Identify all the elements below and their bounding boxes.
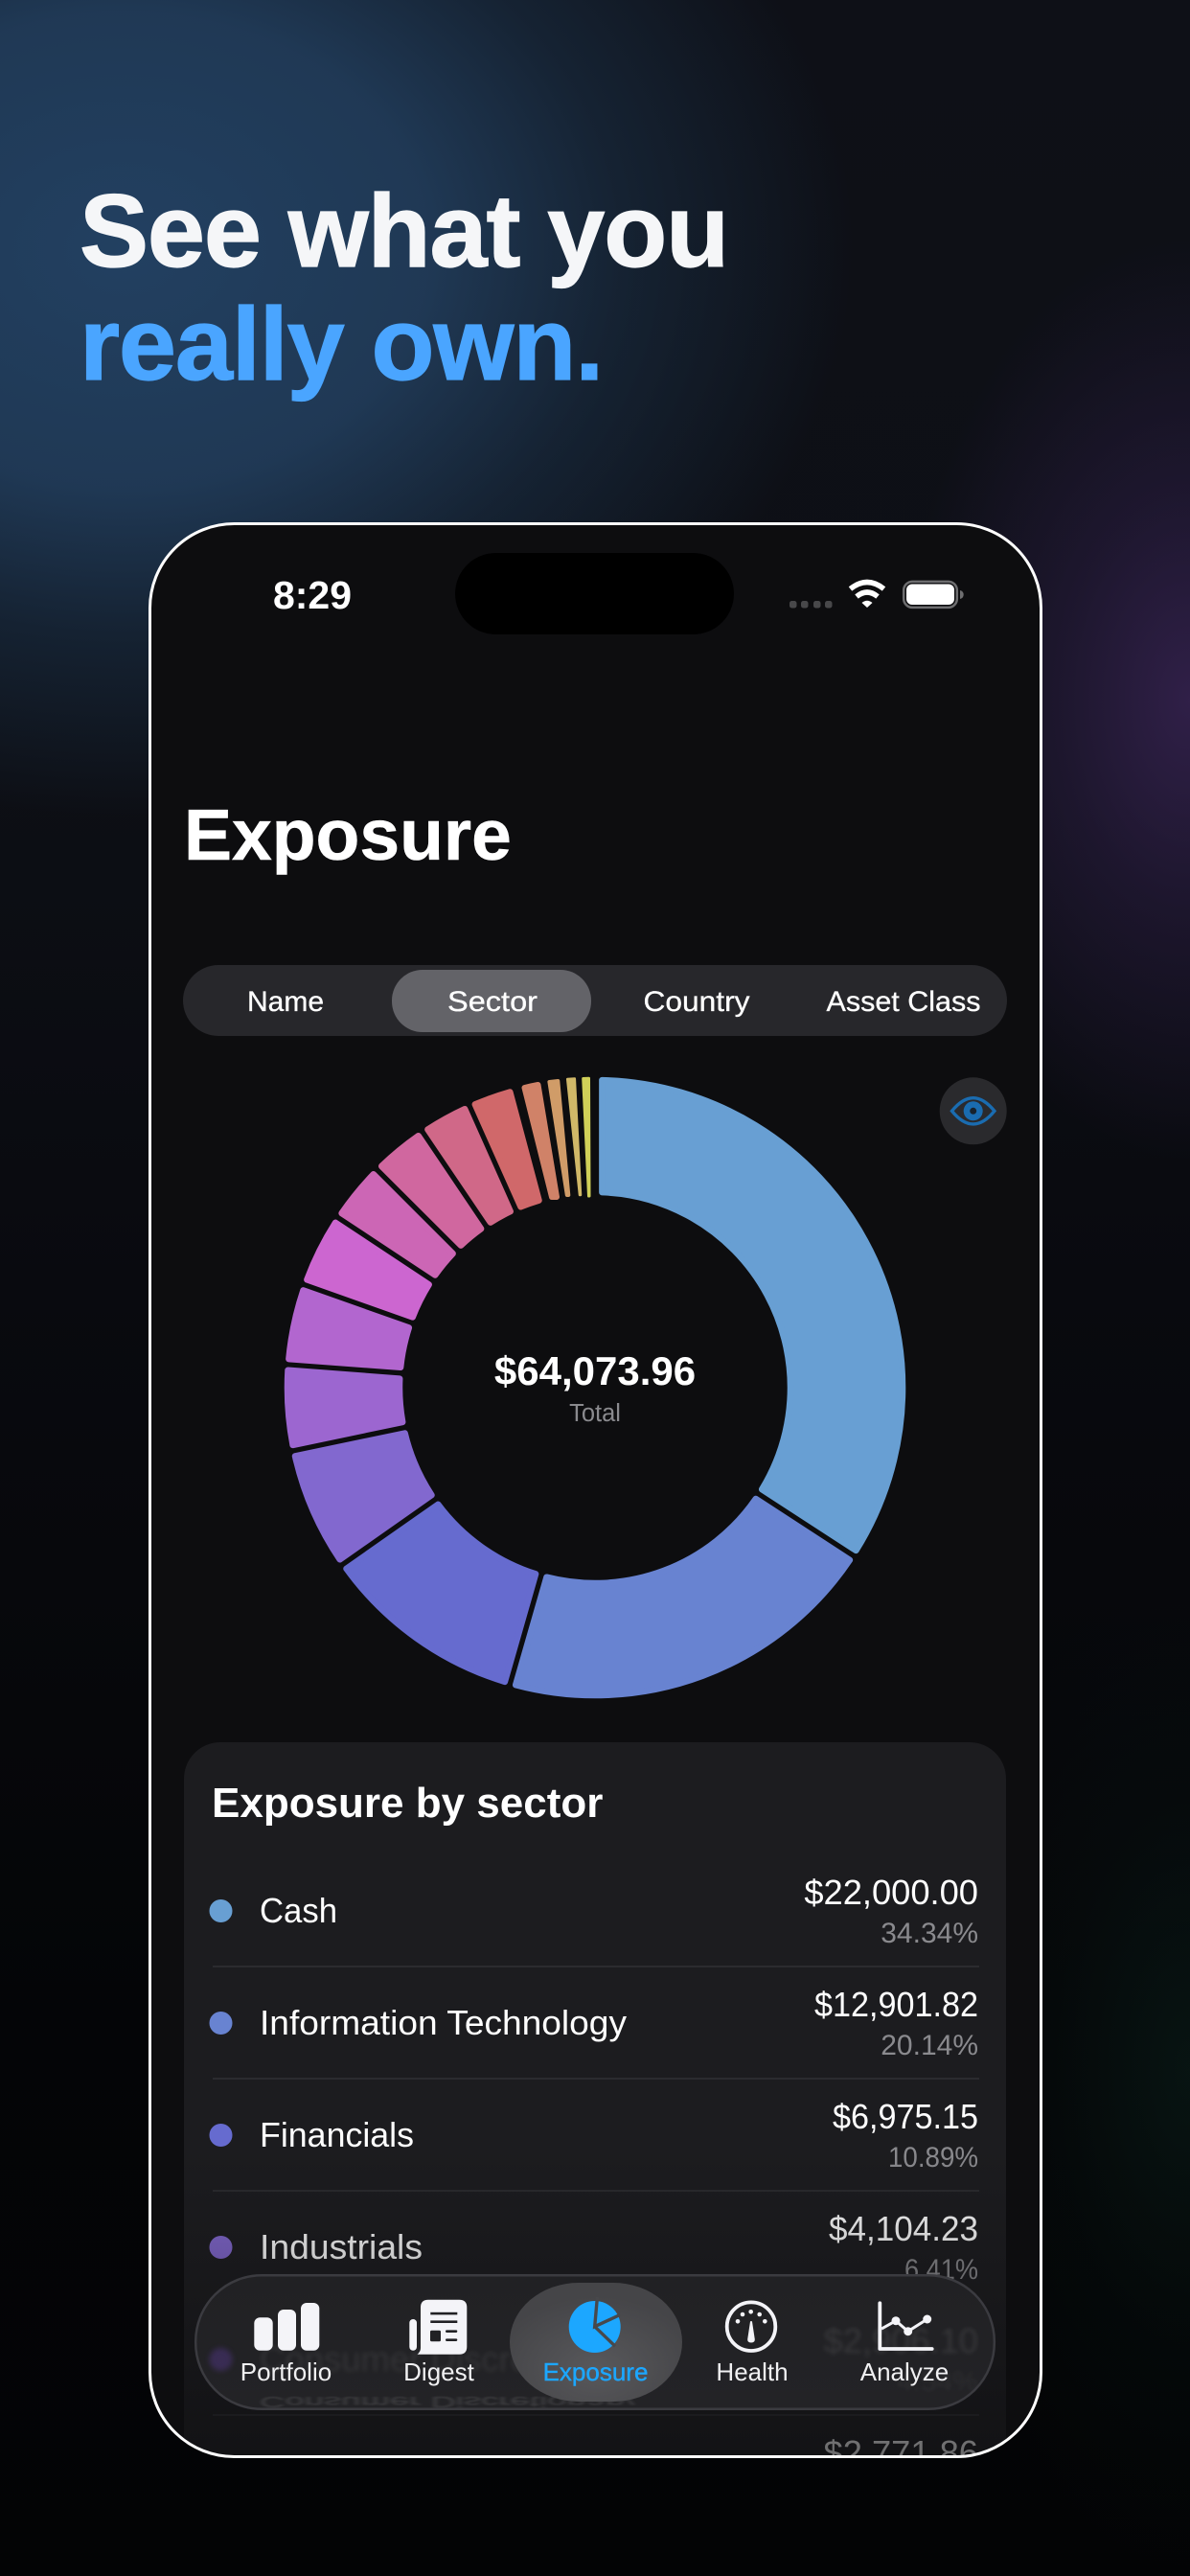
blurred content behind glass: $2,906.10 [824, 2321, 978, 2360]
title: really own. [80, 286, 603, 402]
row: cash [209, 1878, 977, 1944]
icon: bars [254, 2303, 319, 2351]
tab: exposure: Exposure [543, 2358, 648, 2386]
donut chart [287, 1078, 903, 1695]
row: industrials: $4,104.23 [829, 2209, 978, 2248]
blurred content behind glass: 4.54% [897, 2366, 978, 2398]
row: information technology: 20.14% [881, 2030, 978, 2061]
tab: portfolio [240, 2303, 332, 2386]
icon: newspaper [409, 2300, 467, 2355]
row: information technology: Information Technology [260, 2003, 628, 2042]
status bar time: 8:29 [273, 573, 352, 617]
status icons [790, 582, 964, 608]
icon: battery [904, 582, 964, 608]
row: information technology [209, 1990, 977, 2055]
row: information technology: $12,901.82 [814, 1985, 978, 2024]
tab bar [195, 2275, 995, 2410]
segment: slice 7 [307, 1223, 429, 1317]
segment: slice 8 [342, 1174, 453, 1275]
segment: information technology [515, 1499, 850, 1695]
blurred content behind glass [207, 2329, 976, 2407]
segmented control: Name [247, 986, 324, 1018]
segment: slice 14 [567, 1079, 581, 1195]
segmented control [183, 965, 1007, 1036]
row: industrials: 6.41% [904, 2254, 978, 2286]
tab: digest: Digest [403, 2358, 475, 2386]
segment: slice 11 [475, 1092, 538, 1207]
panel heading: Exposure by sector [212, 1780, 603, 1827]
icon: gauge [727, 2302, 775, 2351]
segment: slice 9 [381, 1136, 481, 1246]
bottom fade [184, 2215, 1006, 2455]
active tab pill [510, 2283, 682, 2402]
tab: exposure [543, 2297, 648, 2386]
panel: exposure by sector [184, 1742, 1006, 2455]
segment: slice 15 [584, 1078, 589, 1196]
phone screen [149, 523, 1041, 2457]
segment: consumer discretionary [287, 1370, 402, 1445]
row: financials: Financials [260, 2115, 414, 2154]
segment: financials [347, 1505, 536, 1682]
row: cash: $22,000.00 [804, 1873, 978, 1912]
phone frame [149, 523, 1041, 2457]
segment: slice 10 [427, 1109, 511, 1223]
title [80, 172, 728, 402]
icon: line chart [880, 2303, 932, 2349]
blurred content behind glass: Consumer Discretionary [260, 2339, 635, 2379]
tab: portfolio: Portfolio [240, 2358, 332, 2386]
icon: signal dots [790, 601, 832, 608]
icon: pie chart [569, 2297, 621, 2353]
tab: health [716, 2302, 789, 2386]
phone mockup [149, 523, 1041, 2576]
segmented control: Country [644, 986, 749, 1018]
row: next amount: $2,771.86 [824, 2433, 978, 2472]
segment: slice 13 [549, 1081, 568, 1195]
row: financials: 10.89% [888, 2142, 978, 2174]
segment: slice 6 [288, 1290, 409, 1368]
row: cash: 34.34% [881, 1918, 978, 1949]
row: financials [209, 2103, 977, 2168]
title: See what you [80, 172, 728, 288]
donut total [494, 1355, 695, 1422]
tab: digest [403, 2300, 475, 2386]
tab: health: Health [716, 2358, 789, 2386]
icon: wifi [851, 583, 883, 608]
icon: eye toggle [940, 1077, 1007, 1144]
segmented control: Asset Class [826, 986, 981, 1018]
segment: slice 12 [525, 1085, 557, 1197]
row: industrials [209, 2215, 977, 2279]
selected tab [392, 970, 591, 1032]
tab: analyze [860, 2303, 949, 2386]
row: cash: Cash [260, 1891, 337, 1930]
tab: analyze: Analyze [860, 2358, 949, 2386]
donut total: Total [569, 1400, 621, 1427]
segment: industrials [295, 1434, 431, 1559]
segment: cash [602, 1080, 903, 1551]
donut total: $64,073.96 [494, 1348, 696, 1393]
row: financials: $6,975.15 [833, 2097, 978, 2136]
screen title: Exposure [184, 794, 512, 875]
glass bar [195, 2275, 995, 2409]
segmented control: Sector [447, 986, 538, 1018]
blurred content behind glass: Consumer Discretionary [260, 2394, 634, 2410]
dynamic island [455, 553, 734, 634]
row: industrials: Industrials [260, 2227, 423, 2266]
phone content [150, 553, 1041, 2576]
